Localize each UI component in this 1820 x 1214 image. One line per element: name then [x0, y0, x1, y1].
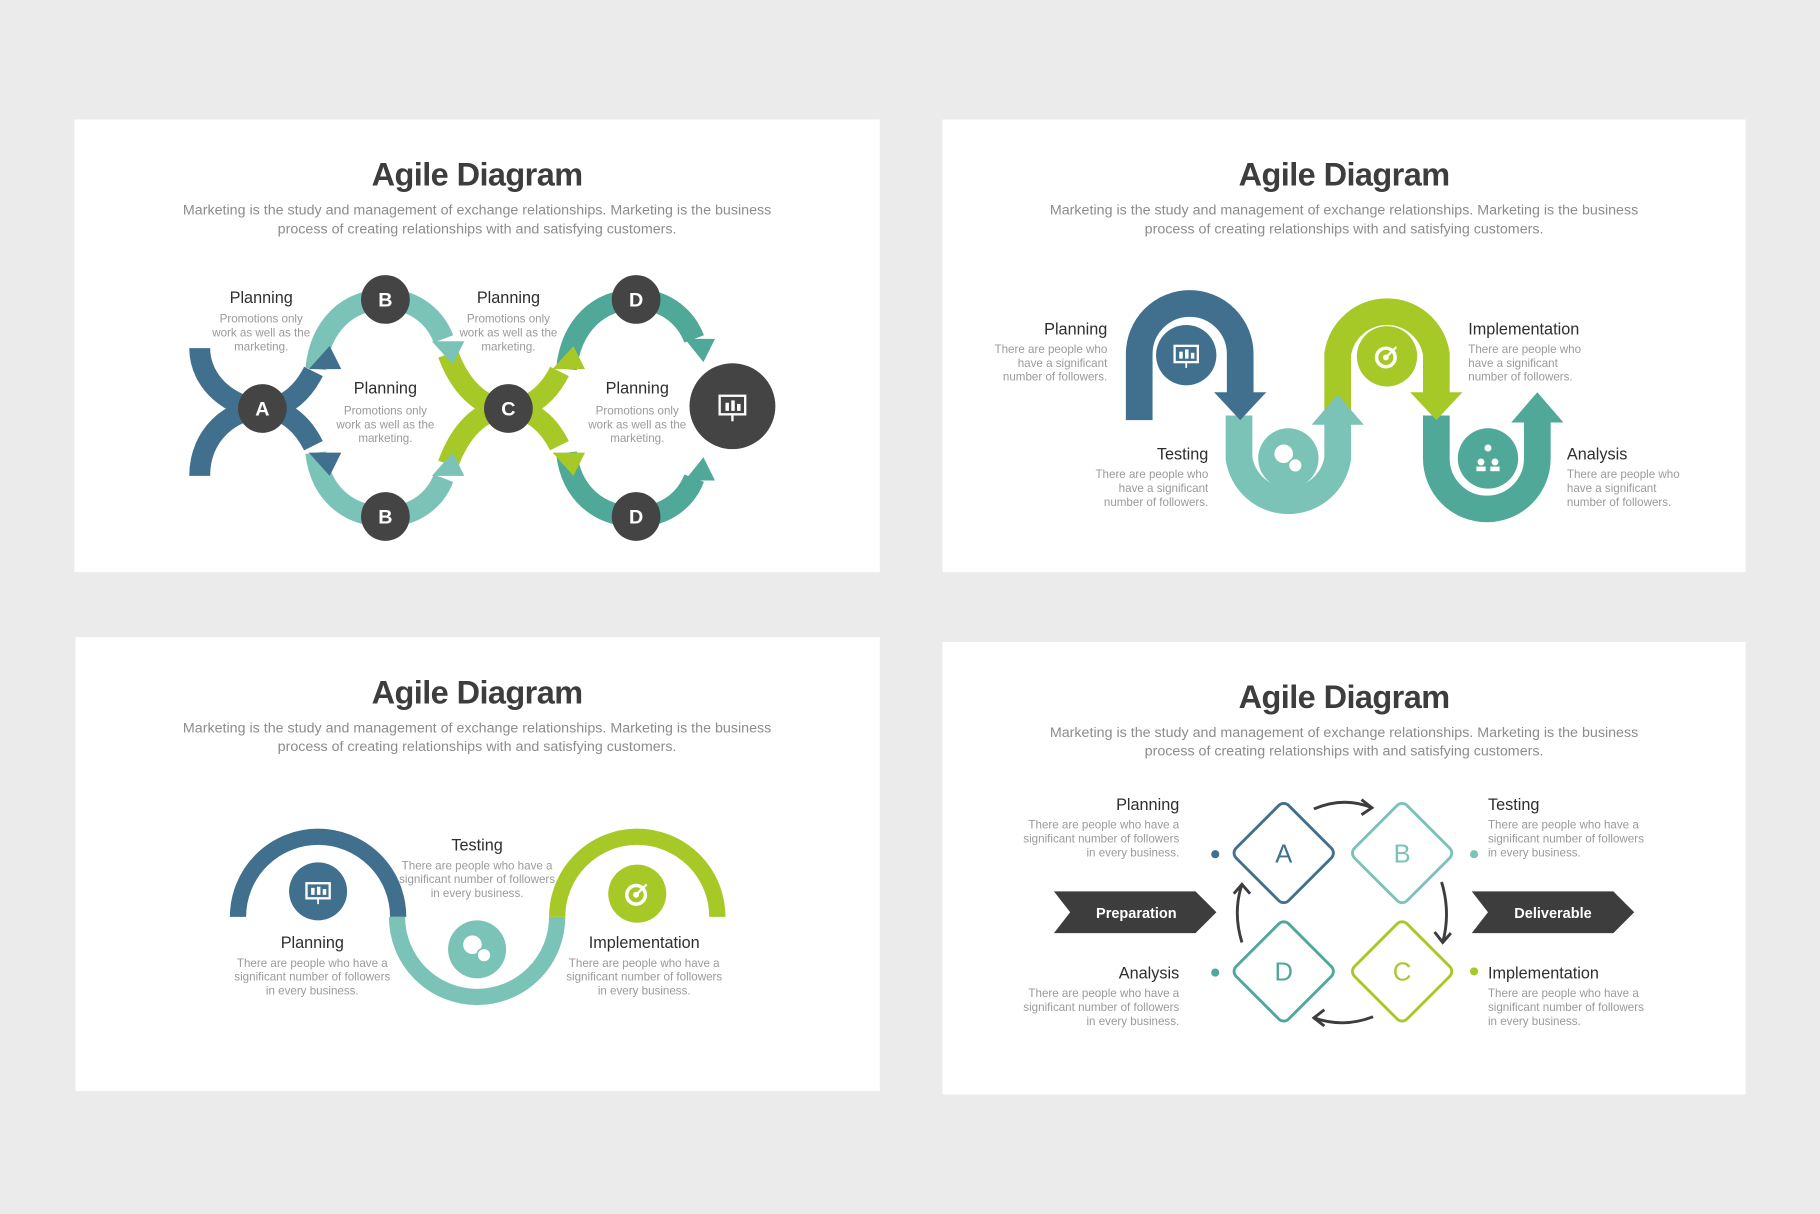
- subtitle: process of creating relationships with and satisfying customers.: [1145, 744, 1543, 760]
- labels: have a significant: [1468, 357, 1559, 370]
- diamonds: [1231, 801, 1455, 1024]
- wave: [238, 837, 717, 997]
- labels: marketing.: [234, 341, 288, 354]
- labels: have a significant: [1567, 482, 1657, 495]
- labels: Testing: [1157, 446, 1208, 464]
- nodes: D: [629, 506, 643, 528]
- labels: Planning: [1044, 320, 1107, 338]
- labels: Promotions only: [596, 404, 679, 417]
- labels: There are people who have a: [569, 957, 720, 970]
- labels: Promotions only: [467, 313, 550, 326]
- labels: marketing.: [358, 432, 412, 445]
- labels: Testing: [451, 837, 503, 855]
- subtitle: Marketing is the study and management of exchange relationships. Marketing is the business: [183, 203, 771, 219]
- labels: Planning: [281, 934, 344, 952]
- nodes: C: [501, 398, 516, 420]
- panel: bottom-right diamond cycle: B: [1394, 840, 1411, 868]
- labels: in every business.: [1488, 847, 1581, 860]
- labels: Planning: [230, 289, 293, 307]
- icon: big presentation circle: [689, 363, 775, 449]
- nodes: B: [378, 506, 393, 528]
- panel: bottom-right diamond cycle: D: [1274, 959, 1293, 987]
- labels: number of followers.: [1104, 496, 1208, 509]
- labels: significant number of followers: [234, 971, 390, 984]
- labels: in every business.: [1488, 1015, 1581, 1028]
- labels: Implementation: [1488, 964, 1599, 982]
- labels: work as well as the: [587, 418, 686, 431]
- cycle arrows: [1234, 800, 1451, 1026]
- title: Agile Diagram: [372, 157, 583, 193]
- labels: number of followers.: [1567, 496, 1671, 509]
- subtitle: Marketing is the study and management of exchange relationships. Marketing is the business: [1050, 725, 1638, 741]
- labels: have a significant: [1119, 482, 1209, 495]
- labels: have a significant: [1018, 357, 1108, 370]
- title: Agile Diagram: [1239, 679, 1450, 715]
- nodes: B: [378, 289, 393, 311]
- labels: significant number of followers: [1488, 833, 1644, 846]
- chevron: Preparation: [1054, 891, 1216, 933]
- icons: [289, 862, 666, 978]
- chevron: Preparation: Preparation: [1096, 906, 1177, 922]
- diagram: crossing arrows: [200, 299, 694, 516]
- panel: bottom-left wave: [76, 637, 880, 1091]
- labels: significant number of followers: [1023, 1001, 1179, 1014]
- labels: Implementation: [589, 934, 700, 952]
- labels: work as well as the: [458, 327, 557, 340]
- subtitle: Marketing is the study and management of exchange relationships. Marketing is the business: [183, 720, 771, 736]
- labels: work as well as the: [335, 418, 434, 431]
- labels: Promotions only: [220, 313, 303, 326]
- chevron: Deliverable: [1472, 891, 1634, 933]
- panel: top-right serpentine arrows: [942, 120, 1746, 572]
- labels: significant number of followers: [566, 971, 722, 984]
- nodes: A: [255, 398, 270, 420]
- labels: [211, 289, 686, 445]
- nodes: D: [629, 289, 643, 311]
- labels: There are people who have a: [237, 957, 388, 970]
- labels: in every business.: [431, 887, 523, 900]
- labels: There are people who: [1567, 468, 1680, 481]
- labels: significant number of followers: [399, 873, 555, 886]
- panel: bottom-right diamond cycle: A: [1275, 840, 1292, 868]
- labels: There are people who: [1095, 468, 1208, 481]
- labels: marketing.: [481, 341, 535, 354]
- labels: Planning: [1116, 796, 1179, 814]
- subtitle: process of creating relationships with and satisfying customers.: [278, 221, 677, 237]
- chevron: Deliverable: Deliverable: [1514, 906, 1592, 922]
- labels: There are people who have a: [1028, 987, 1180, 1000]
- labels: Implementation: [1468, 320, 1579, 338]
- labels: Analysis: [1567, 446, 1627, 464]
- title: Agile Diagram: [372, 674, 583, 710]
- panel: top-left x-curve diagram: [74, 120, 880, 572]
- labels: Analysis: [1119, 964, 1179, 982]
- labels: significant number of followers: [1023, 833, 1179, 846]
- dots: [1211, 850, 1478, 977]
- title: Agile Diagram: [1239, 157, 1450, 193]
- labels: in every business.: [1086, 1015, 1179, 1028]
- labels: marketing.: [610, 432, 664, 445]
- labels: work as well as the: [211, 327, 310, 340]
- labels: There are people who have a: [1028, 819, 1180, 832]
- labels: Planning: [477, 289, 540, 307]
- labels: There are people who have a: [1488, 987, 1639, 1000]
- labels: number of followers.: [1003, 371, 1107, 384]
- labels: [995, 320, 1680, 509]
- subtitle: Marketing is the study and management of exchange relationships. Marketing is the business: [1050, 203, 1638, 219]
- panel: bottom-right diamond cycle: [942, 642, 1746, 1094]
- labels: in every business.: [266, 985, 359, 998]
- labels: in every business.: [598, 985, 691, 998]
- labels: [1023, 796, 1644, 1028]
- labels: There are people who have a: [1488, 819, 1639, 832]
- subtitle: process of creating relationships with and satisfying customers.: [1145, 221, 1543, 237]
- serpentine: [1139, 304, 1537, 509]
- labels: Promotions only: [344, 404, 427, 417]
- labels: There are people who: [995, 343, 1107, 356]
- subtitle: process of creating relationships with and satisfying customers.: [278, 739, 677, 755]
- panel: bottom-right diamond cycle: C: [1393, 959, 1411, 987]
- icons: [1156, 325, 1518, 489]
- labels: [234, 837, 722, 998]
- nodes: [238, 275, 660, 541]
- labels: Planning: [354, 379, 417, 397]
- labels: There are people who have a: [402, 859, 553, 872]
- labels: in every business.: [1086, 847, 1179, 860]
- labels: significant number of followers: [1488, 1001, 1644, 1014]
- labels: There are people who: [1468, 343, 1581, 356]
- labels: Planning: [606, 379, 669, 397]
- labels: Testing: [1488, 796, 1539, 814]
- labels: number of followers.: [1468, 371, 1573, 384]
